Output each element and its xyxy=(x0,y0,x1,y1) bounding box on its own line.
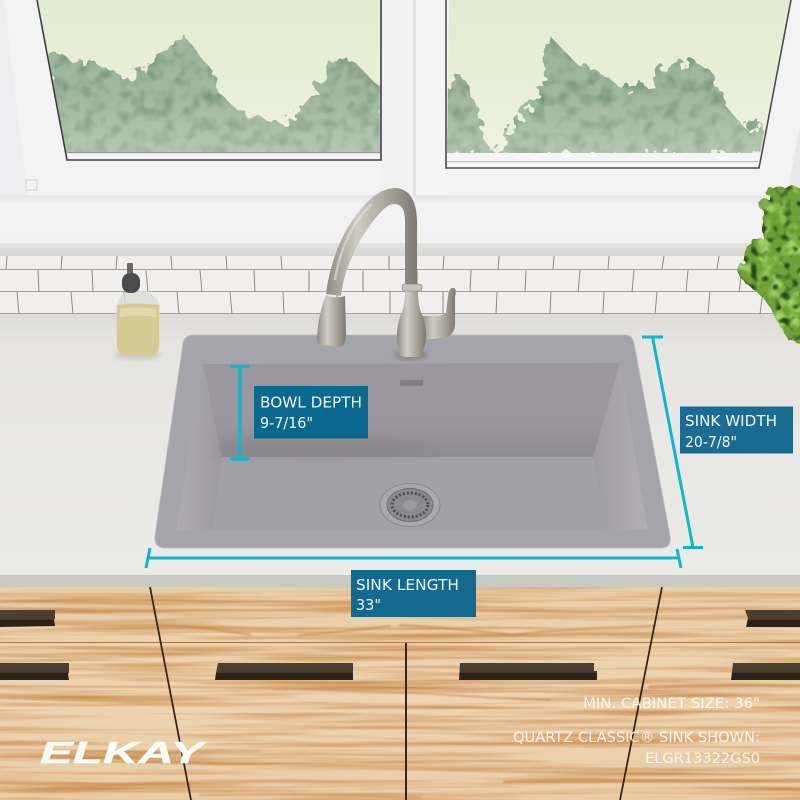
drawer handles xyxy=(0,610,800,680)
potted plant xyxy=(738,186,800,346)
sink rim xyxy=(155,335,670,548)
left wall of bowl xyxy=(177,364,222,530)
bracket: sink width xyxy=(642,337,703,548)
wood grain streaks xyxy=(0,625,800,797)
bracket: sink length xyxy=(146,548,681,568)
soap bottle xyxy=(114,263,162,360)
handle xyxy=(421,288,456,340)
dimension: sink width xyxy=(642,337,793,548)
backsplash tiles xyxy=(0,256,800,316)
sink xyxy=(155,335,670,548)
note: cabinet size and model xyxy=(513,696,760,767)
note: cabinet size and model: ELGR13322GS0 xyxy=(645,751,760,767)
note: cabinet size and model: QUARTZ CLASSIC® SINK SHOWN: xyxy=(513,730,760,746)
left window xyxy=(37,0,385,160)
window frame and wall xyxy=(0,0,800,200)
window sill xyxy=(0,195,800,256)
logo plate xyxy=(400,380,423,386)
label: bowl depth xyxy=(254,386,368,438)
right wall of bowl xyxy=(593,363,647,530)
countertop xyxy=(0,314,800,587)
drain xyxy=(380,484,440,526)
panel seams xyxy=(0,587,800,800)
bowl floor xyxy=(213,457,608,530)
label: sink width: SINK WIDTH xyxy=(685,412,777,430)
back wall of bowl xyxy=(203,363,620,457)
bracket: bowl depth xyxy=(230,366,250,459)
faucet xyxy=(317,188,456,360)
cabinets xyxy=(0,587,800,800)
label: sink width xyxy=(680,406,793,454)
label: bowl depth: 9-7/16" xyxy=(260,414,313,432)
label: bowl depth: BOWL DEPTH xyxy=(260,394,362,412)
dimension: bowl depth xyxy=(230,366,368,459)
spout xyxy=(326,188,417,296)
logo: Elkay: ELKAY xyxy=(40,735,208,770)
sprayer head xyxy=(317,295,346,347)
dimension: sink length xyxy=(146,548,681,617)
label: sink width: 20-7/8" xyxy=(685,433,737,451)
label: sink length: SINK LENGTH xyxy=(356,576,459,594)
faucet body xyxy=(397,291,426,357)
label: sink length: 33" xyxy=(356,596,381,614)
note: cabinet size and model: MIN. CABINET SIZE: 36" xyxy=(583,696,760,712)
right window xyxy=(440,0,791,168)
label: sink length xyxy=(351,570,476,617)
